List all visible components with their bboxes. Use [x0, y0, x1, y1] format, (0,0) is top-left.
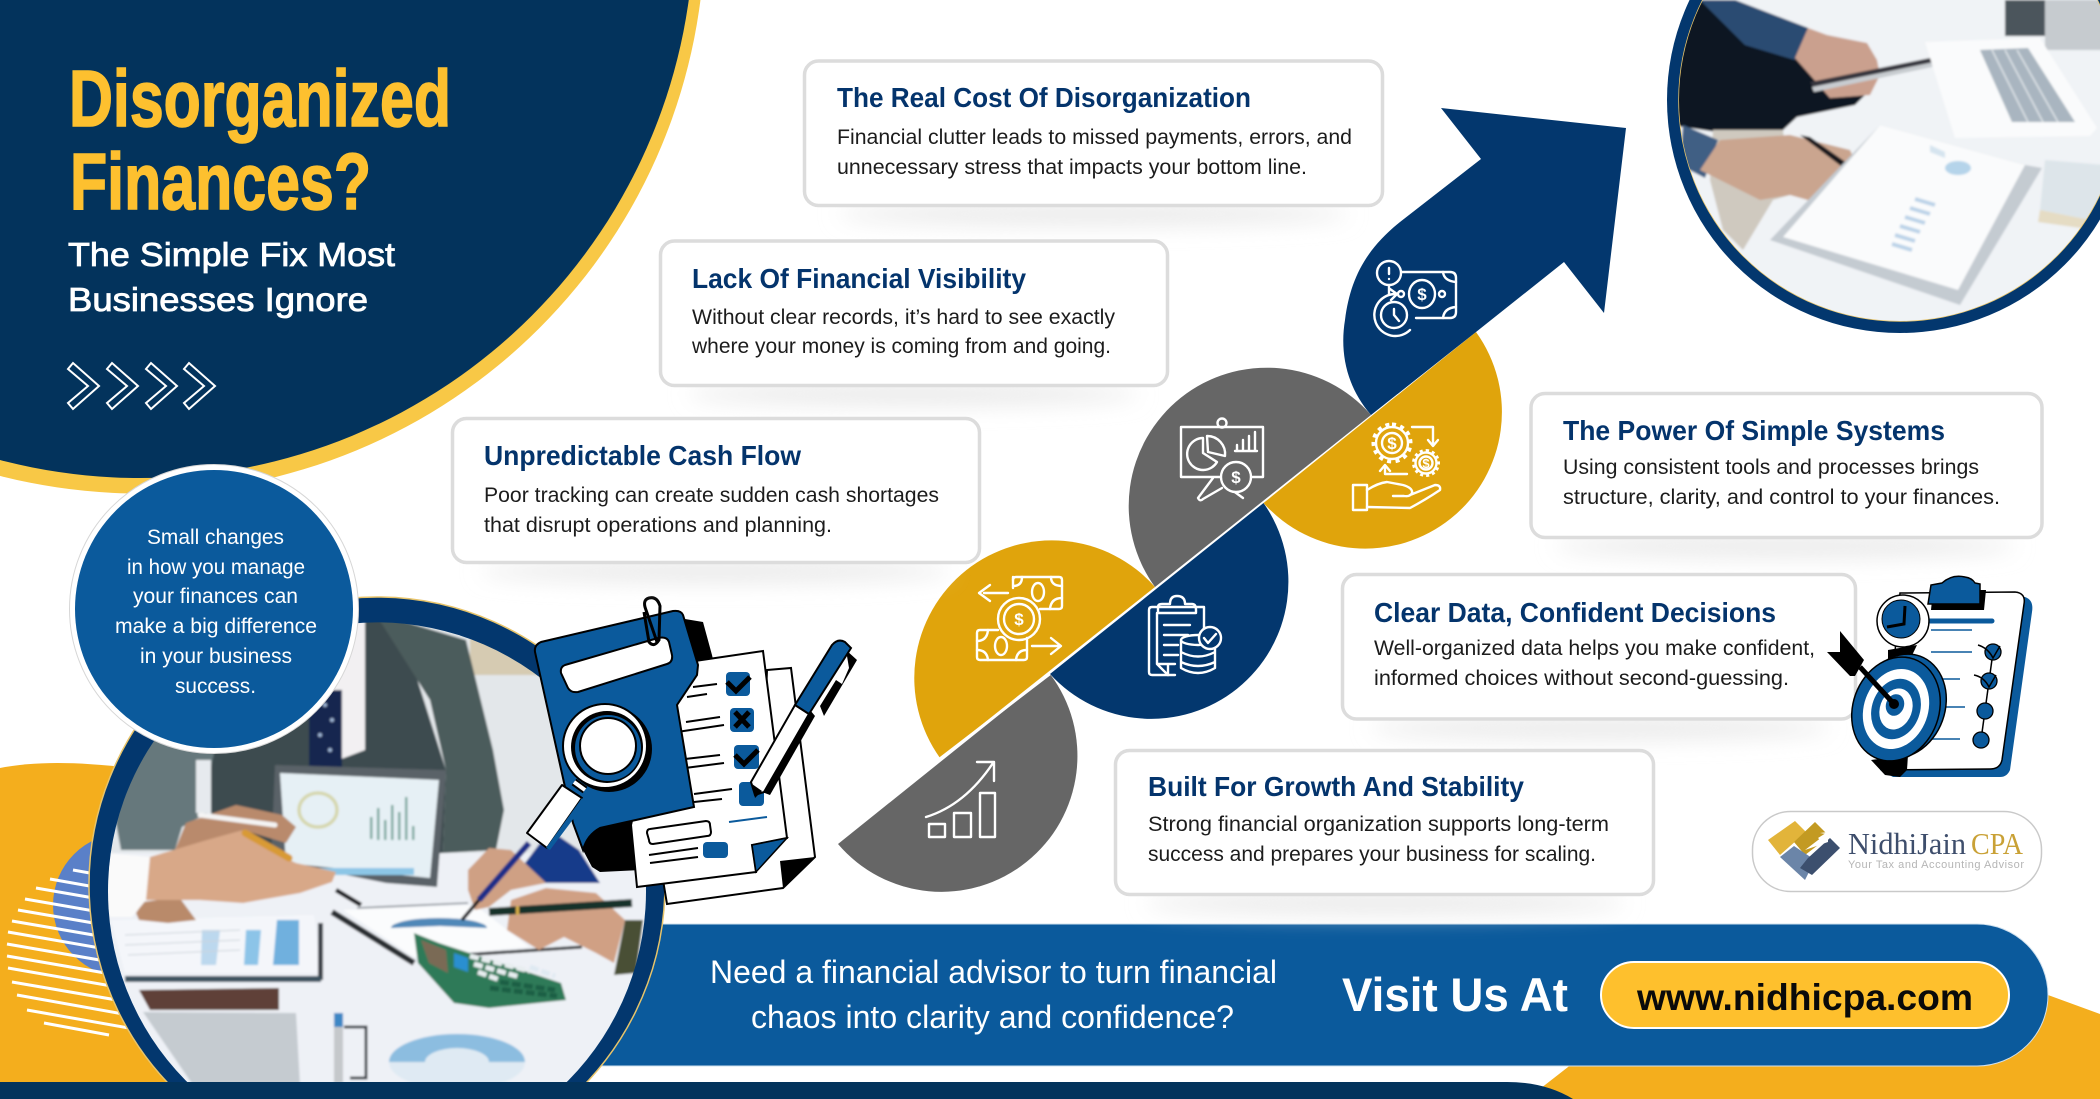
logo mark [1768, 821, 1840, 880]
logo tagline: Your Tax and Accounting Advisor [1848, 859, 2024, 871]
card: power of simple systems: The Power Of Simple Systems [1563, 415, 1945, 446]
card: built for growth: success and prepares your business for scaling. [1148, 843, 1596, 866]
icon: presentation chart [1181, 418, 1263, 500]
logo badge: CPA [1971, 826, 2024, 861]
callout circle: make a big difference [115, 615, 317, 638]
header panel [0, 0, 705, 494]
website pill: www.nidhicpa.com [1636, 977, 1973, 1018]
segment: gold left [914, 540, 1155, 758]
bottom dark band [0, 1082, 1573, 1099]
step arrow diagram [838, 108, 1626, 892]
card: lack of visibility: Without clear records, it’s hard to see exactly [692, 306, 1115, 329]
form box [647, 821, 711, 844]
website pill [1601, 962, 2009, 1028]
title: Disorganized [69, 54, 451, 143]
checkboxes [726, 672, 764, 806]
segment: navy arrow head [1343, 108, 1626, 415]
card: clear data: Clear Data, Confident Decisions [1374, 597, 1776, 628]
icon: clipboard and database [1149, 596, 1221, 675]
card: power of simple systems: Using consistent tools and processes brings [1563, 456, 1979, 479]
icon: banknote with clock [1374, 261, 1456, 336]
card: lack of visibility: Lack Of Financial Visibility [692, 263, 1026, 294]
callout circle: in your business [140, 645, 292, 668]
banner question [710, 954, 1277, 1035]
photo: hands reviewing a report [1667, 0, 2100, 340]
card: the real cost [804, 61, 1382, 206]
periwinkle circle accent [53, 833, 197, 977]
illustration: target and checklist [1827, 576, 2032, 777]
icon: growth chart [926, 762, 995, 837]
segment: gold right [1264, 332, 1502, 549]
illustration: clipboard with magnifier and pen [527, 598, 857, 904]
desk items [111, 915, 321, 973]
card: built for growth [1116, 750, 1654, 894]
magnifier [527, 704, 652, 850]
checklist lines [649, 684, 767, 863]
hands [175, 805, 296, 850]
icon: money arrows: $ [1014, 610, 1024, 629]
card: unpredictable cash flow: Unpredictable Cash Flow [484, 440, 801, 471]
clock [1877, 595, 1929, 680]
card: unpredictable cash flow: that disrupt operations and planning. [484, 514, 832, 537]
visit us at label: Visit Us At [1342, 968, 1568, 1021]
title [69, 54, 451, 226]
icon: banknote with clock: $ [1417, 285, 1427, 304]
callout circle [70, 464, 358, 754]
logo badge [1752, 812, 2042, 892]
clip [1928, 576, 1986, 610]
card: the real cost: Financial clutter leads to missed payments, errors, and [837, 126, 1352, 149]
callout circle: your finances can [133, 585, 298, 608]
folder [535, 611, 698, 850]
segment: navy lower [1050, 503, 1288, 719]
card: the real cost: unnecessary stress that impacts your bottom line. [837, 156, 1307, 179]
card: lack of visibility [660, 241, 1168, 386]
call to action banner [500, 924, 2048, 1066]
segment: gray upper [1129, 368, 1371, 587]
chevrons [68, 363, 215, 409]
card shadows [480, 203, 2015, 914]
left orange background shape [0, 763, 200, 1099]
folder label [561, 638, 672, 692]
paperclip [644, 598, 660, 645]
banner question: chaos into clarity and confidence? [751, 999, 1234, 1035]
checklist [1925, 621, 2001, 748]
card: clear data: informed choices without second-guessing. [1374, 667, 1789, 690]
subtitle [68, 236, 395, 318]
callout circle: Small changes [147, 526, 284, 549]
subtitle: The Simple Fix Most [68, 236, 395, 273]
subtitle: Businesses Ignore [68, 281, 368, 318]
icon: money arrows [977, 577, 1062, 660]
card: built for growth: Strong financial organization supports long-term [1148, 813, 1609, 836]
card: the real cost: The Real Cost Of Disorganization [837, 82, 1251, 113]
card: lack of visibility: where your money is coming from and going. [691, 335, 1111, 358]
pen [751, 641, 857, 798]
logo wordmark: NidhiJain [1848, 826, 1966, 861]
icon: gears and hand [1353, 424, 1440, 510]
callout circle: success. [175, 675, 256, 698]
card: unpredictable cash flow [452, 418, 980, 562]
card: unpredictable cash flow: Poor tracking can create sudden cash shortages [484, 484, 939, 507]
card: clear data: Well-organized data helps you make confident, [1374, 637, 1815, 660]
banner question: Need a financial advisor to turn financial [710, 954, 1277, 990]
card: built for growth: Built For Growth And Stability [1148, 771, 1524, 802]
icon: gears and hand: $ [1387, 434, 1397, 453]
icon: gears and hand: $ [1422, 456, 1430, 471]
card: clear data [1342, 574, 1856, 719]
white striped decoration [7, 870, 140, 1035]
segment: bottom gray [838, 674, 1077, 892]
right orange background shape [1527, 995, 2100, 1099]
title: Finances? [70, 137, 371, 226]
callout circle: in how you manage [127, 556, 305, 579]
card: power of simple systems [1531, 394, 2042, 538]
card: power of simple systems: structure, clarity, and control to your finances. [1563, 486, 2000, 509]
target [1827, 631, 1961, 777]
photo: meeting around the table [89, 597, 665, 1099]
icon: presentation chart: $ [1231, 468, 1241, 487]
